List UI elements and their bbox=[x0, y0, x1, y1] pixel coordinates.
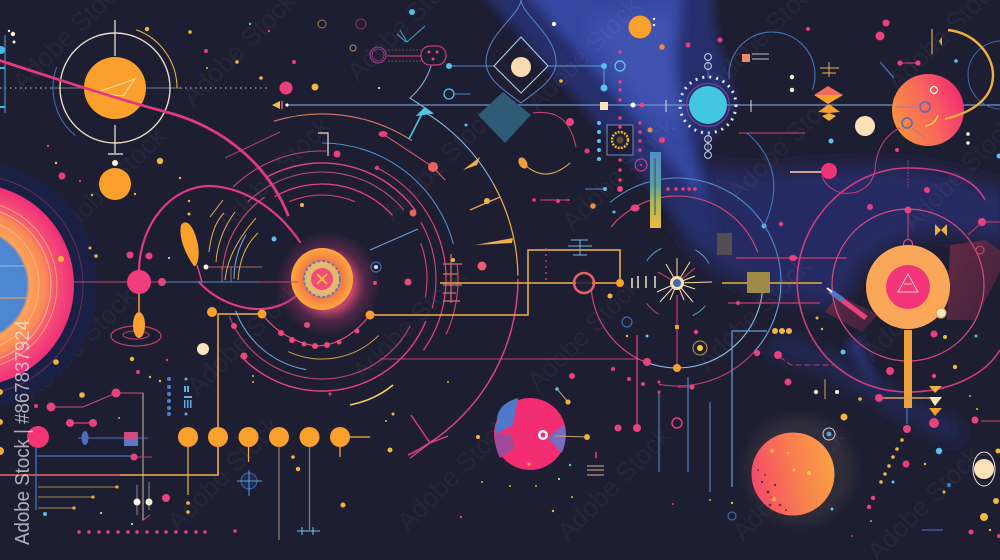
top-left orange sun target bbox=[0, 1, 270, 200]
orange chevrons bbox=[814, 62, 843, 121]
centre-right rings with starburst bbox=[530, 135, 824, 429]
faint watermarks: Adobe Stock bbox=[521, 270, 647, 396]
bottom-right triangles and connectors bbox=[774, 351, 1000, 530]
bar glyph near core bbox=[371, 254, 486, 303]
lower-centre vertical rods bbox=[380, 317, 767, 520]
concentric arcs around central core bbox=[53, 10, 591, 548]
blue nebula bbox=[470, 0, 1000, 435]
left edge ladder bbox=[0, 35, 5, 113]
faint watermarks: Adobe Stock bbox=[726, 420, 852, 546]
diamond pendant bbox=[478, 0, 647, 174]
main horizontal axis bbox=[272, 100, 1000, 112]
faint watermarks: Adobe Stock bbox=[551, 420, 677, 546]
blue ticks glyph bbox=[167, 377, 192, 416]
faint watermarks: Adobe Stock bbox=[181, 275, 307, 401]
scattered cyan and blue dots bbox=[118, 23, 1000, 522]
faint watermarks: Adobe Stock bbox=[556, 110, 682, 236]
left large planet bbox=[0, 161, 97, 409]
orange planet bbox=[738, 408, 862, 532]
blue open circle with square bbox=[725, 28, 819, 229]
faint watermarks: Adobe Stock bbox=[691, 250, 817, 376]
top-right planet and arc bbox=[855, 29, 1000, 146]
row of orange nodes bbox=[178, 427, 370, 540]
beaded arc bbox=[197, 278, 412, 360]
faint watermarks: Adobe Stock bbox=[391, 410, 517, 536]
right large target with warning triangle bbox=[797, 168, 1000, 408]
sun icon box bbox=[607, 125, 633, 155]
circuit connector with O glyph bbox=[528, 240, 847, 305]
faint watermarks: Adobe Stock bbox=[46, 120, 172, 246]
stock id label: Adobe Stock | #867837924 bbox=[12, 320, 34, 545]
left node and petal bbox=[70, 200, 298, 346]
faint watermarks: Adobe Stock bbox=[16, 280, 142, 406]
faint watermarks: Adobe Stock bbox=[721, 80, 847, 206]
pie planet bbox=[494, 387, 590, 470]
faint watermarks: Adobe Stock bbox=[376, 100, 502, 226]
faint watermarks: Adobe Stock bbox=[161, 410, 287, 536]
top device glyphs bbox=[318, 9, 513, 245]
faint watermarks: Adobe Stock bbox=[211, 110, 337, 236]
yellow circuit traces bbox=[0, 250, 822, 475]
central glowing core bbox=[276, 232, 380, 336]
faint watermarks: Adobe Stock bbox=[346, 260, 472, 386]
faint watermarks: Adobe Stock bbox=[856, 240, 982, 366]
pink sweeping curves bbox=[0, 60, 300, 309]
cyan orb with dotted ring bbox=[680, 54, 736, 158]
right connector node bbox=[790, 128, 908, 193]
lower-left circuit bbox=[0, 388, 170, 520]
